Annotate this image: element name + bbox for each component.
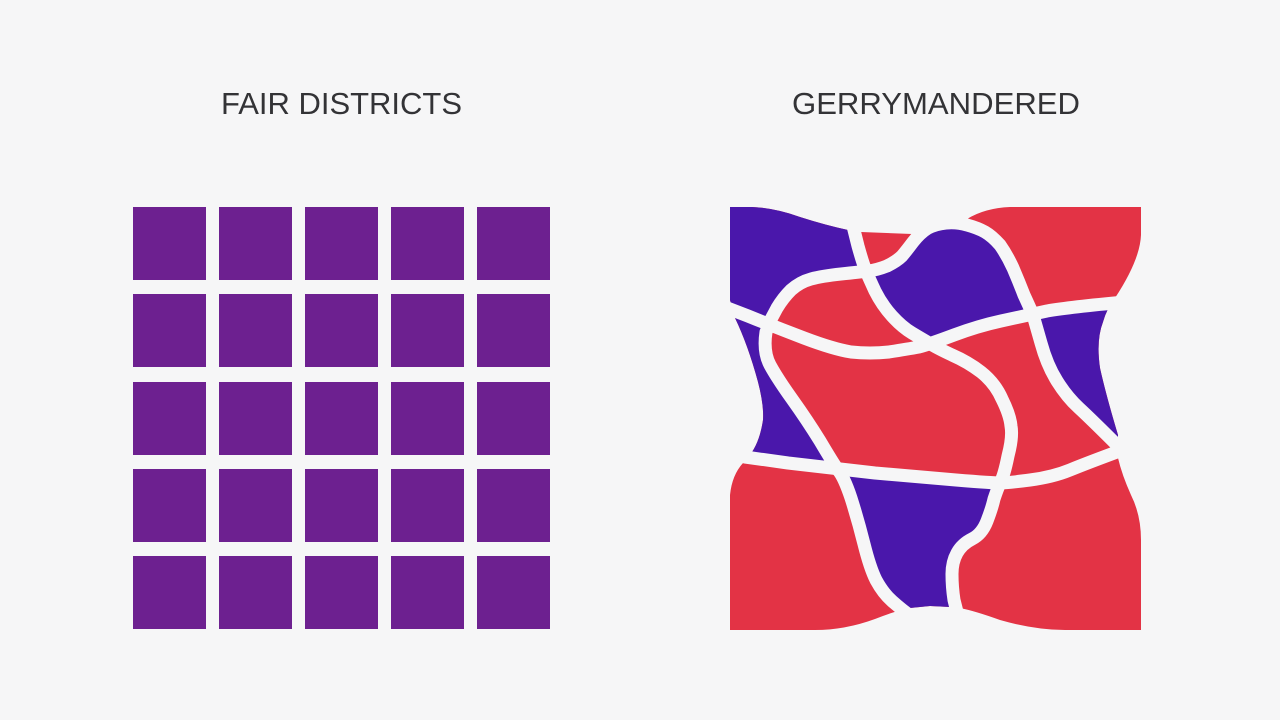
panel: gerrymandered map <box>720 200 1150 640</box>
blue district: left <box>735 318 824 461</box>
left heading: FAIR DISTRICTS <box>221 86 462 121</box>
right heading: GERRYMANDERED <box>792 86 1080 121</box>
infographic canvas <box>133 92 1141 630</box>
map regions <box>720 200 1150 640</box>
blue district: bottom <box>850 476 991 608</box>
panel: fair districts grid <box>133 207 550 629</box>
blue district: right <box>1040 310 1118 437</box>
district boundaries <box>722 222 1125 617</box>
blue district: top centre <box>875 229 1024 336</box>
blue district: top left <box>730 207 858 316</box>
red districts base <box>720 200 1150 640</box>
